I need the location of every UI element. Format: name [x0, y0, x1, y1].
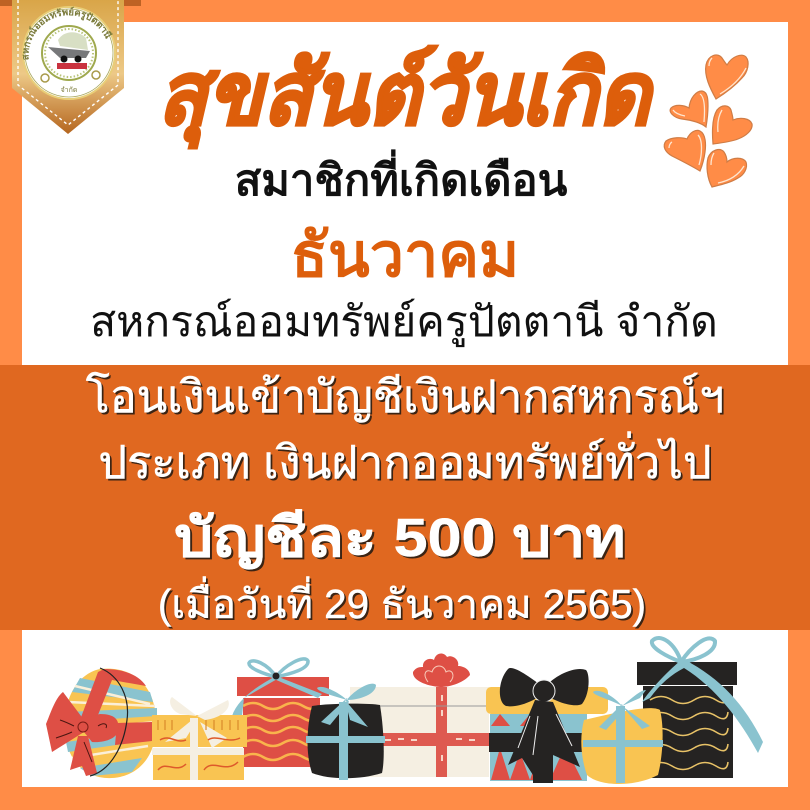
gift: yellow box with blue ribbon	[581, 690, 663, 784]
heading: December: ธันวาคม	[291, 221, 519, 289]
title: สุขสันต์วันเกิด	[158, 46, 650, 144]
gift: round striped box	[46, 668, 157, 778]
badge: gold pennant with seal: จำกัด	[61, 86, 77, 94]
gift: red wavy box	[232, 659, 329, 767]
badge: gold pennant with seal	[12, 0, 124, 134]
cooperative name: สหกรณ์ออมทรัพย์ครูปัตตานี จำกัด	[90, 298, 718, 346]
band text: account type: ประเภท เงินฝากออมทรัพย์ทั่วไป	[98, 437, 712, 488]
band text: transfer to deposit account: โอนเงินเข้าบัญชีเงินฝากสหกรณ์ฯ	[86, 372, 724, 422]
icon: hearts	[664, 54, 753, 188]
gift: black box with blue ribbon	[306, 684, 385, 780]
gift: patterned box with black bow	[486, 668, 608, 783]
gift: tall black box with blue ribbon	[637, 638, 763, 778]
gift: cream ribbon yellow box	[152, 697, 247, 780]
band text: amount per account: บัญชีละ 500 บาท	[174, 508, 626, 568]
orange band	[0, 365, 810, 630]
band text: date: (เมื่อวันที่ 29 ธันวาคม 2565)	[158, 581, 646, 627]
top ribbon strip	[0, 0, 141, 6]
gift: cream box with red ribbon and flower	[350, 654, 490, 777]
heading: members born in month: สมาชิกที่เกิดเดือน	[235, 157, 567, 205]
illustration: row of gift boxes	[46, 636, 763, 784]
badge: gold pennant with seal: สหกรณ์ออมทรัพย์ครูปัตตานี	[22, 6, 113, 60]
